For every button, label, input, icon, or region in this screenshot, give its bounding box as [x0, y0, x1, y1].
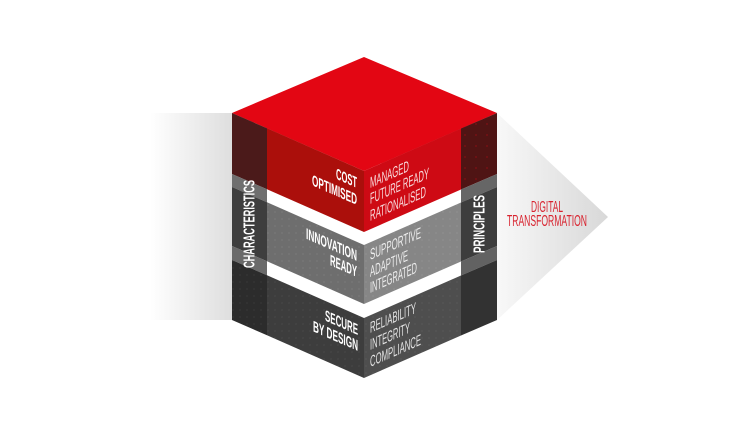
- list: secure by design traits: RELIABILITY: [370, 299, 416, 337]
- label: characteristics: CHARACTERISTICS: [242, 180, 258, 268]
- arrow head: right gradient triangle: [497, 113, 608, 320]
- cube top face: [232, 57, 497, 171]
- list: innovation ready traits: ADAPTIVE: [370, 247, 408, 281]
- layer: innovation ready: [267, 202, 461, 304]
- list: cost optimised traits: RATIONALISED: [370, 183, 426, 225]
- right face: innovation ready: [364, 202, 461, 304]
- list: innovation ready traits: INTEGRATED: [370, 259, 417, 297]
- heading: innovation ready: [306, 225, 357, 281]
- list: cost optimised traits: [370, 158, 429, 225]
- label: digital transformation: DIGITAL: [531, 199, 563, 216]
- heading: secure by design: BY DESIGN: [313, 318, 358, 355]
- heading: cost optimised: [312, 165, 357, 209]
- list: innovation ready traits: SUPPORTIVE: [370, 224, 421, 264]
- layer: secure by design: COMPLIANCE: [370, 331, 421, 371]
- left face: secure by design: [267, 275, 364, 378]
- right face: secure by design: [364, 276, 461, 378]
- label: digital transformation: [507, 199, 587, 230]
- list: cost optimised traits: MANAGED: [370, 158, 409, 192]
- column: characteristics: [232, 113, 267, 335]
- list: secure by design traits: INTEGRITY: [370, 319, 410, 354]
- heading: innovation ready: INNOVATION: [306, 225, 357, 265]
- layer: innovation ready: READY: [330, 252, 357, 281]
- arrow tail: left gradient band: [150, 113, 232, 320]
- heading: cost optimised: OPTIMISED: [312, 172, 357, 209]
- left face: innovation ready: [267, 202, 364, 304]
- label: principles: PRINCIPLES: [472, 195, 488, 253]
- left face: cost optimised: [267, 128, 364, 232]
- layer: cost optimised: FUTURE READY: [370, 165, 429, 208]
- heading: secure by design: [313, 307, 358, 355]
- texture: dark layer dots: [232, 113, 497, 378]
- right face: cost optimised: [364, 128, 461, 232]
- list: innovation ready traits: [370, 224, 421, 297]
- layer: cost optimised: COST: [336, 165, 357, 192]
- list: secure by design traits: [370, 299, 421, 371]
- column: principles: [461, 113, 497, 336]
- layer: secure by design: [267, 275, 461, 378]
- label: digital transformation: TRANSFORMATION: [507, 213, 587, 230]
- layer: cost optimised: [267, 128, 461, 232]
- heading: secure by design: SECURE: [325, 307, 358, 339]
